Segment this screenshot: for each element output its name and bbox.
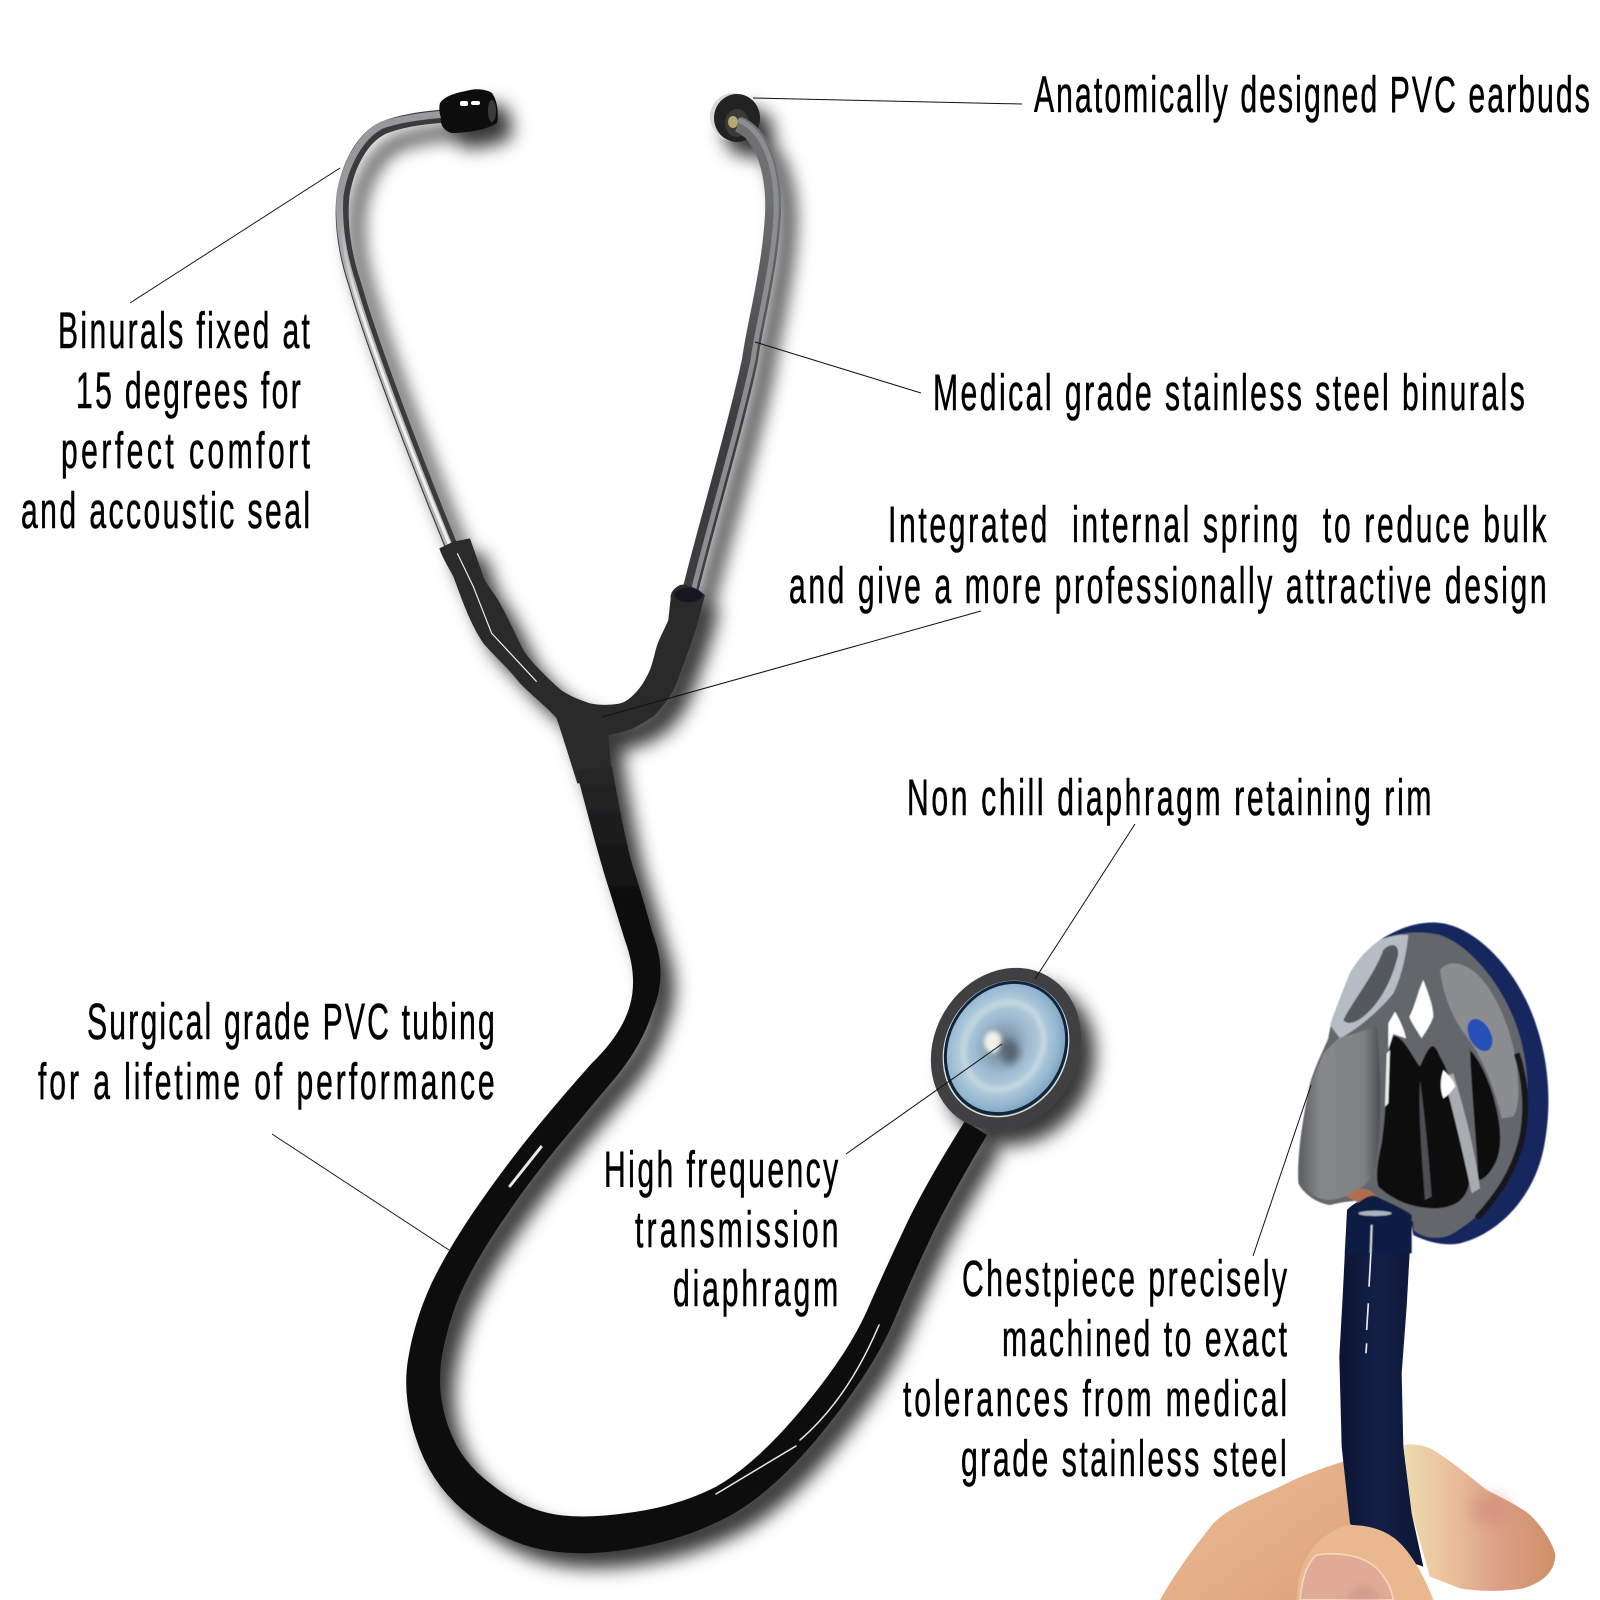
grey lower-left panel xyxy=(1300,1027,1380,1200)
text: internal spring: Integrated internal spring to reduce bulk xyxy=(888,496,1546,553)
label: stainless binaurals xyxy=(755,342,1525,421)
blue reflection xyxy=(1462,1015,1498,1055)
leader line: chestpiece xyxy=(1253,1085,1311,1256)
navy rim xyxy=(1380,922,1548,1244)
label: earbuds xyxy=(753,66,1590,123)
leader line: binaural angle xyxy=(130,168,340,303)
text: PVC tubing: for a lifetime of performance xyxy=(38,1053,495,1110)
left earpiece xyxy=(439,89,498,133)
black main tubing xyxy=(406,767,987,1553)
chestpiece xyxy=(902,940,1110,1158)
navy tube xyxy=(1339,1196,1423,1567)
black y-junction tubing xyxy=(439,538,705,783)
right earpiece xyxy=(710,93,760,142)
label: binaural angle xyxy=(21,168,340,539)
text: binaural angle: 15 degrees for xyxy=(76,362,301,419)
text: diaphragm: High frequency xyxy=(604,1141,838,1198)
label: internal spring xyxy=(602,496,1547,717)
label: retaining rim xyxy=(907,769,1432,979)
text: retaining rim: Non chill diaphragm retaining rim xyxy=(907,769,1432,826)
text: binaural angle: and accoustic seal xyxy=(21,482,310,539)
text: PVC tubing: Surgical grade PVC tubing xyxy=(87,993,495,1050)
text: diaphragm: transmission xyxy=(635,1201,839,1258)
light top-left reflection xyxy=(1330,935,1408,1038)
black reflections xyxy=(1377,1036,1470,1208)
leader line: PVC tubing xyxy=(272,1134,449,1250)
close-up chestpiece photo xyxy=(1160,922,1555,1600)
hand behind tube xyxy=(1160,1196,1555,1600)
text: internal spring xyxy=(789,496,1547,614)
right binaural tube xyxy=(690,120,776,592)
text: chestpiece: tolerances from medical xyxy=(903,1370,1287,1427)
left binaural tube xyxy=(340,114,452,548)
dark ring edge xyxy=(1477,1053,1525,1218)
text: binaural angle: Binurals fixed at xyxy=(58,302,310,359)
white highlights xyxy=(1409,980,1433,1038)
leader line: internal spring xyxy=(602,611,981,717)
text: PVC tubing xyxy=(38,993,495,1110)
tube cap xyxy=(1345,1196,1412,1253)
thumb xyxy=(1297,1525,1433,1600)
leader line: stainless binaurals xyxy=(755,342,921,393)
text: stainless binaurals: Medical grade stainless steel binurals xyxy=(933,364,1525,421)
text: binaural angle: perfect comfort xyxy=(61,422,310,479)
text: chestpiece: Chestpiece precisely xyxy=(962,1250,1287,1307)
leader line: earbuds xyxy=(753,98,1022,104)
label: chestpiece xyxy=(903,1085,1311,1487)
text: binaural angle xyxy=(21,302,310,539)
diaphragm xyxy=(922,960,1090,1136)
metal dome xyxy=(1298,922,1548,1253)
tubing highlights xyxy=(510,1147,879,1494)
text: diaphragm xyxy=(604,1141,839,1317)
text: diaphragm: diaphragm xyxy=(673,1260,838,1317)
top right grey panel xyxy=(1440,963,1518,1118)
leader line: diaphragm xyxy=(846,1044,1002,1154)
text: chestpiece: machined to exact xyxy=(1002,1310,1287,1367)
text: chestpiece: grade stainless steel xyxy=(961,1430,1287,1487)
text: chestpiece xyxy=(903,1250,1287,1487)
thumbnail xyxy=(1300,1554,1393,1600)
text: internal spring: and give a more professionally attractive design xyxy=(789,557,1547,614)
text: earbuds: Anatomically designed PVC earbuds xyxy=(1034,66,1590,123)
leader line: retaining rim xyxy=(1035,824,1135,979)
label: PVC tubing xyxy=(38,993,495,1250)
label: diaphragm xyxy=(604,1044,1002,1317)
